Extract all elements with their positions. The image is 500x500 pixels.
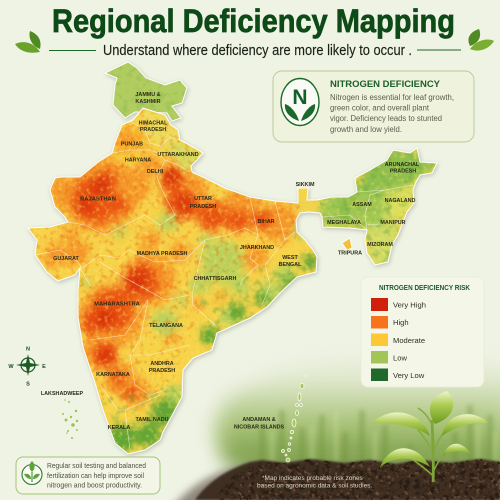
state label: Maharashtra: MAHARASHTRA — [94, 302, 141, 308]
state label: Assam: ASSAM — [352, 202, 372, 208]
mainland heat surface — [20, 100, 450, 460]
background photo: field and soil — [170, 355, 500, 500]
Tripura — [342, 238, 352, 250]
label: Andaman and Nicobar: NICOBAR ISLANDS — [234, 424, 285, 430]
state label: Jammu and Kashmir: KASHMIR — [135, 99, 161, 105]
state label: Arunachal Pradesh: PRADESH — [390, 168, 416, 174]
callout text: Regular soil testing and balanced — [47, 461, 146, 470]
panel body text: green color, and overall plant — [330, 104, 430, 112]
legend: nitrogen deficiency risk — [361, 277, 484, 387]
lower left leaf — [380, 448, 430, 467]
callout: soil testing tip — [16, 457, 160, 494]
icon: compass: E — [42, 364, 46, 370]
state label: Mizoram: MIZORAM — [367, 242, 393, 248]
state label: Himachal Pradesh: PRADESH — [140, 127, 166, 133]
Lakshadweep islands — [62, 399, 78, 439]
subtitle rule left — [49, 50, 96, 52]
blurred field — [215, 355, 500, 500]
state label: Tamil Nadu: TAMIL NADU — [135, 417, 169, 423]
state label: Madhya Pradesh: MADHYA PRADESH — [137, 251, 188, 257]
label: Lakshadweep: LAKSHADWEEP — [41, 391, 84, 397]
callout text: nitrogen and boost productivity. — [47, 480, 142, 490]
right big leaf — [442, 414, 488, 436]
left big leaf — [372, 412, 430, 436]
panel body text: vigor. Deficiency leads to stunted — [330, 114, 442, 123]
icon: nitrogen badge: N — [292, 86, 308, 109]
lower right leaf — [443, 444, 471, 456]
panel: nitrogen deficiency — [273, 71, 474, 142]
icon: compass: S — [26, 382, 30, 388]
title: Regional Deficiency Mapping — [52, 3, 455, 39]
state label: West Bengal: WEST — [282, 255, 298, 261]
icon: leaves left — [15, 31, 41, 53]
icon: leaves right — [468, 29, 494, 51]
note: map indicates risk zones: *Map indicates probable risk zones — [262, 475, 364, 482]
state label: Karnataka: KARNATAKA — [96, 372, 130, 378]
state label: Andhra Pradesh: PRADESH — [149, 368, 175, 374]
legend item: very low: Very Low — [393, 371, 425, 380]
state label: Rajasthan: RAJASTHAN — [80, 196, 116, 202]
state label: Nagaland: NAGALAND — [385, 198, 416, 204]
note: map indicates risk zones: based on agronomic data & soil studies. — [257, 482, 372, 490]
state label: West Bengal: BENGAL — [279, 262, 302, 268]
state label: Uttar Pradesh: UTTAR — [194, 196, 212, 202]
north east states — [320, 192, 392, 228]
state label: Punjab: PUNJAB — [121, 142, 143, 148]
panel body text: growth and low yield. — [330, 125, 402, 134]
legend item: low: Low — [393, 354, 407, 362]
state label: Bihar: BIHAR — [257, 219, 275, 225]
panel body text: Nitrogen is essential for leaf growth, — [330, 93, 454, 102]
soil — [170, 459, 500, 500]
legend title: NITROGEN DEFICIENCY RISK — [379, 283, 471, 292]
state label: Manipur: MANIPUR — [380, 220, 406, 226]
state label: Sikkim: SIKKIM — [296, 182, 315, 188]
legend item: moderate: Moderate — [393, 336, 425, 345]
state label: Kerala: KERALA — [108, 425, 130, 431]
subtitle: Understand where deficiency are more likely to occur . — [103, 42, 412, 59]
state label: Chhattisgarh: CHHATTISGARH — [194, 276, 236, 282]
orange and red zones — [44, 130, 298, 407]
mottled orange texture — [30, 110, 300, 400]
state boundaries — [35, 121, 413, 450]
stem — [432, 420, 433, 482]
Jammu and Kashmir — [100, 60, 190, 122]
state label: Jharkhand: JHARKHAND — [240, 245, 274, 251]
mottled green texture — [100, 140, 450, 460]
light texture — [36, 113, 434, 454]
state label: Himachal Pradesh: HIMACHAL — [139, 120, 168, 126]
state label: Gujarat: GUJARAT — [53, 256, 80, 262]
legend item: very high: Very High — [393, 300, 426, 310]
top leaf — [430, 391, 453, 424]
label: Andaman and Nicobar: ANDAMAN & — [242, 417, 276, 423]
subtitle rule right — [417, 49, 461, 51]
branches — [402, 408, 450, 475]
state label: Uttarakhand: UTTARAKHAND — [157, 152, 199, 158]
state label: Arunachal Pradesh: ARUNACHAL — [385, 162, 420, 168]
state label: Uttar Pradesh: PRADESH — [190, 204, 216, 210]
state label: Andhra Pradesh: ANDHRA — [150, 361, 174, 367]
icon: compass — [8, 346, 46, 388]
Andaman and Nicobar islands — [282, 375, 307, 462]
green zones — [80, 212, 307, 405]
plant seedling — [372, 391, 488, 482]
icon: compass: W — [8, 364, 14, 370]
icon: nitrogen badge — [281, 78, 319, 126]
state label: Jammu and Kashmir: JAMMU & — [135, 92, 161, 98]
upper states — [140, 111, 178, 146]
map of India — [20, 60, 450, 460]
legend item: high: High — [393, 318, 409, 327]
state label: Haryana: HARYANA — [125, 158, 151, 164]
icon: sprout — [22, 461, 42, 484]
panel heading: NITROGEN DEFICIENCY — [330, 79, 440, 89]
state label: Delhi: DELHI — [147, 169, 164, 175]
state label: Tripura: TRIPURA — [338, 250, 362, 256]
icon: compass: N — [26, 346, 30, 352]
callout text: fertilization can help improve soil — [47, 471, 144, 480]
state label: Meghalaya: MEGHALAYA — [327, 220, 361, 226]
state label: Telangana: TELANGANA — [149, 323, 183, 329]
